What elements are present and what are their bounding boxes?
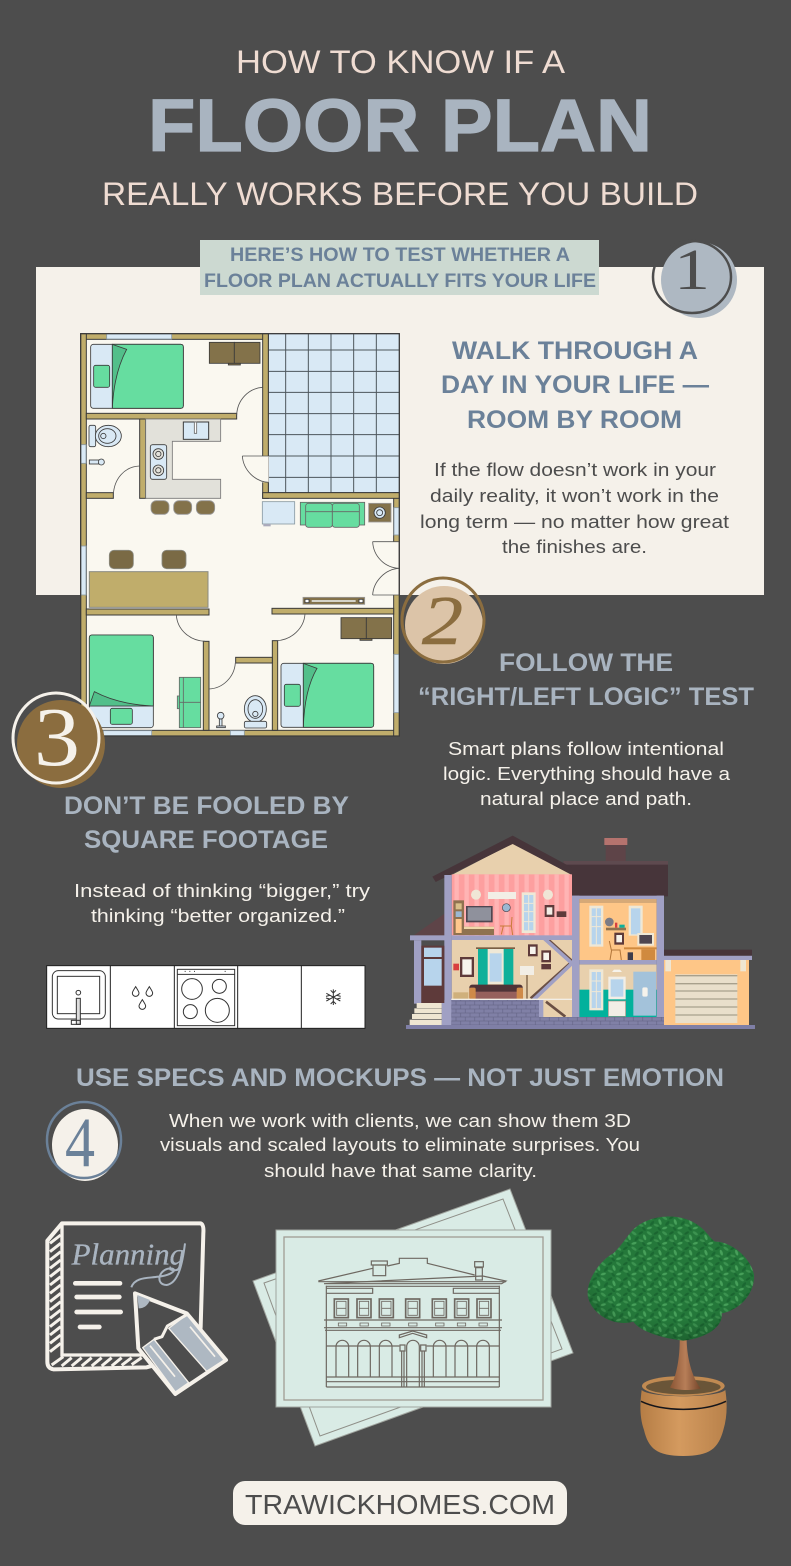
title line one: HOW TO KNOW IF A xyxy=(236,44,566,80)
step 3 body text: Instead of thinking “bigger,” try xyxy=(74,880,371,901)
foliage xyxy=(588,1217,754,1341)
step 3 body text xyxy=(74,880,371,926)
step 2 body text: logic. Everything should have a xyxy=(443,763,731,784)
right roof xyxy=(563,861,668,896)
icon: snowflake xyxy=(326,989,341,1005)
step 3 heading: DON’T BE FOOLED BY xyxy=(64,792,349,820)
step 3 heading xyxy=(64,792,349,854)
dresser xyxy=(177,677,201,728)
foliage shading xyxy=(588,1217,754,1341)
pool tiles xyxy=(268,334,399,493)
banner: FLOOR PLAN ACTUALLY FITS YOUR LIFE xyxy=(204,271,596,292)
step 2 body text xyxy=(443,738,731,809)
badge: step 4 xyxy=(47,1102,121,1182)
icon: stove xyxy=(177,969,235,1026)
icon: planning notebook and pencil xyxy=(47,1223,226,1394)
house cross-section illustration xyxy=(406,836,755,1029)
front door xyxy=(421,946,444,1003)
step 2 body text: natural place and path. xyxy=(480,788,692,809)
pot back rim xyxy=(642,1376,725,1396)
rear sheet xyxy=(253,1189,573,1446)
panel: cream step one background xyxy=(36,267,764,595)
banner xyxy=(200,240,599,295)
step 2 body text: Smart plans follow intentional xyxy=(448,738,724,759)
step 1 body text: the finishes are. xyxy=(502,536,647,557)
front sheet xyxy=(276,1230,551,1407)
step 2 heading: FOLLOW THE xyxy=(499,649,673,677)
title line three: REALLY WORKS BEFORE YOU BUILD xyxy=(102,176,698,212)
icon: sink xyxy=(52,971,105,1024)
bed bottom left xyxy=(89,635,153,728)
step 2 heading xyxy=(418,649,754,711)
pot band xyxy=(641,1401,726,1409)
windows and door gaps xyxy=(81,334,400,736)
badge: step 4: 4 xyxy=(65,1104,95,1182)
step 4 body text xyxy=(160,1110,640,1181)
step 1 heading: DAY IN YOUR LIFE — xyxy=(441,371,709,399)
kitchen counter xyxy=(146,419,221,498)
step 1 body text xyxy=(420,459,729,557)
step 4 heading: USE SPECS AND MOCKUPS — NOT JUST EMOTION xyxy=(76,1064,724,1092)
upper left room xyxy=(452,874,572,936)
tv unit xyxy=(262,502,295,526)
step 1 heading: ROOM BY ROOM xyxy=(467,406,682,434)
garage xyxy=(664,950,752,1025)
title main words: FLOOR PLAN xyxy=(148,84,652,167)
building elevation line drawing xyxy=(318,1258,506,1387)
soil xyxy=(646,1380,721,1394)
wardrobe top xyxy=(209,342,260,365)
website pill xyxy=(233,1481,567,1525)
step 1 heading: WALK THROUGH A xyxy=(452,337,698,365)
notebook xyxy=(47,1223,203,1369)
toilet bottom xyxy=(217,696,267,728)
badge: step 2: 2 xyxy=(422,583,463,660)
walls xyxy=(81,334,399,736)
step 1 heading xyxy=(441,337,709,434)
badge: step 3: 3 xyxy=(34,691,80,784)
title xyxy=(102,44,698,212)
blueprint sheets xyxy=(253,1189,573,1446)
dining table and chairs xyxy=(89,550,208,607)
outer outline xyxy=(81,334,399,736)
step 3 body text: thinking “better organized.” xyxy=(91,905,345,926)
main roof xyxy=(432,836,572,882)
chimney xyxy=(604,838,627,863)
badge: step 1 xyxy=(653,237,737,318)
lettering flourish xyxy=(131,1243,185,1287)
kitchen appliance strip xyxy=(47,966,365,1028)
badge: step 1: 1 xyxy=(674,237,710,302)
bed bottom right xyxy=(281,663,374,727)
website pill: TRAWICKHOMES.COM xyxy=(245,1489,555,1520)
wardrobe bottom right xyxy=(341,618,392,640)
brick foundation xyxy=(406,999,755,1029)
step 4 body text: When we work with clients, we can show them 3D xyxy=(169,1110,631,1131)
pot body xyxy=(640,1390,727,1456)
side table lamp xyxy=(369,503,391,522)
bed top left xyxy=(91,344,183,408)
bar stools xyxy=(151,501,215,514)
step 3 heading: SQUARE FOOTAGE xyxy=(84,826,328,854)
step 1 body text: long term — no matter how great xyxy=(420,511,729,532)
step 1 body text: If the flow doesn’t work in your xyxy=(434,459,716,480)
lower left room xyxy=(452,940,572,1017)
porch steps xyxy=(410,1003,442,1025)
step 4 body text: visuals and scaled layouts to eliminate surprises. You xyxy=(160,1134,640,1155)
planning lettering: Planning xyxy=(71,1237,185,1271)
stairs xyxy=(531,938,572,1017)
console shelf xyxy=(303,597,365,604)
sofa xyxy=(300,502,365,527)
potted tree xyxy=(588,1217,754,1456)
banner: HERE’S HOW TO TEST WHETHER A xyxy=(230,245,570,266)
upper right room xyxy=(579,899,657,960)
house walls xyxy=(410,875,752,1025)
floor xyxy=(83,337,397,733)
door swings xyxy=(113,387,399,689)
badge: step 2 xyxy=(402,578,484,664)
step 4 body text: should have that same clarity. xyxy=(264,1160,537,1181)
pencil xyxy=(135,1293,226,1394)
badge: step 3 xyxy=(13,691,105,788)
trunk xyxy=(670,1338,701,1390)
lower right room xyxy=(579,964,657,1017)
step 1 body text: daily reality, it won’t work in the xyxy=(430,485,719,506)
floor plan illustration xyxy=(81,334,400,736)
toilet top xyxy=(89,425,121,465)
attic gable xyxy=(452,843,572,875)
step 2 heading: “RIGHT/LEFT LOGIC” TEST xyxy=(418,683,754,711)
icon: water drops xyxy=(132,987,153,1009)
list lines xyxy=(75,1283,121,1327)
left small roof xyxy=(413,913,445,936)
